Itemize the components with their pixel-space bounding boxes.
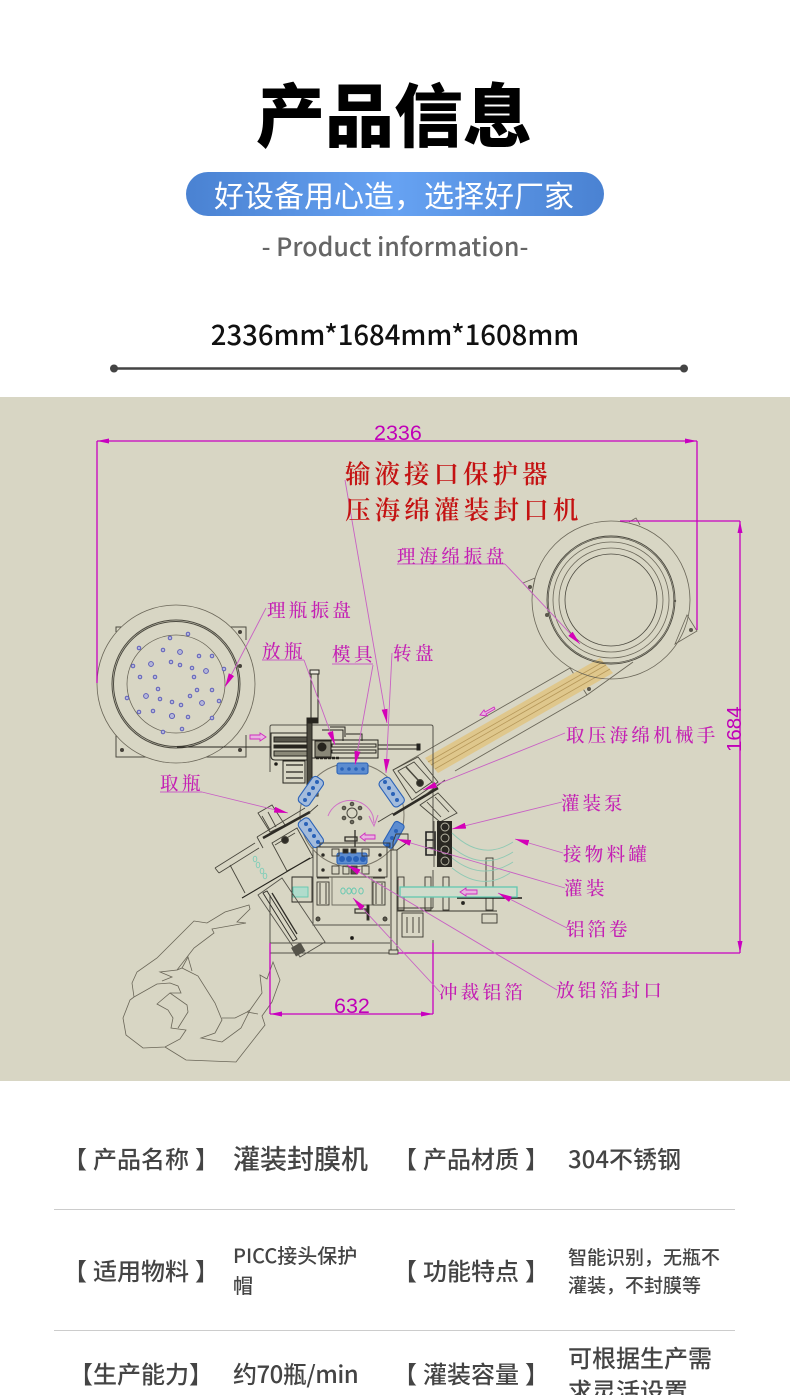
right vibrating bowl: [523, 518, 697, 691]
hollow direction arrows: [250, 707, 495, 896]
left pick arm: [215, 805, 318, 902]
dimension values: [334, 421, 746, 1018]
spec: fill volume label: 【灌装容量】: [393, 1355, 549, 1390]
rotary dial with bottle holders: [297, 763, 406, 864]
part labels: [160, 543, 719, 1005]
drawing title: 输液接口保护器: [345, 455, 552, 491]
part labels: 取瓶: [160, 770, 204, 796]
spec: product name label: 【产品名称】: [63, 1140, 219, 1175]
part labels: 转盘: [393, 640, 437, 666]
dimension values: 1684: [723, 706, 746, 752]
part labels: 接物料罐: [563, 841, 650, 867]
filling pump and tubes: [426, 821, 513, 881]
divider with end dots: [110, 364, 688, 372]
title: 产品信息: [256, 61, 532, 161]
left vibrating bowl: [97, 605, 255, 763]
drawing title: 压海绵灌装封口机: [345, 491, 583, 527]
bottles in bowl: [125, 632, 226, 734]
dimension values: 2336: [374, 421, 422, 445]
part labels: 理瓶振盘: [267, 597, 354, 623]
part labels: 模具: [332, 641, 376, 667]
leader lines: [160, 480, 580, 992]
part labels: 放铝箔封口: [556, 977, 665, 1003]
part labels: 取压海绵机械手: [566, 722, 719, 748]
part labels: 冲裁铝箔: [439, 979, 526, 1005]
spec: applicable material value: 帽: [233, 1270, 253, 1299]
lower-left device: [258, 878, 325, 957]
dimension lines: [97, 441, 740, 1014]
spec: capacity label: 【生产能力】: [69, 1355, 213, 1390]
spec: fill volume value: 可根据生产需: [568, 1339, 712, 1374]
part labels: 理海绵振盘: [397, 543, 508, 569]
tall post and top carriage: [177, 670, 420, 796]
spec: applicable material label: 【适用物料】: [63, 1252, 219, 1287]
machine frame: [270, 725, 433, 953]
punching station: [316, 843, 390, 940]
panel: technical drawing: [0, 397, 790, 1081]
panel: specification table: [54, 1138, 735, 1395]
spec: features label: 【功能特点】: [393, 1252, 549, 1287]
foil roll station: [389, 834, 522, 954]
dimension values: 632: [334, 994, 370, 1018]
drawing title: [345, 455, 583, 527]
subtitle: - Product information-: [262, 228, 528, 264]
spec: material label: 【产品材质】: [393, 1140, 549, 1175]
spec: capacity value: 约70瓶/min: [233, 1355, 358, 1390]
spec: fill volume value: [568, 1339, 712, 1395]
row divider 1: [54, 1209, 735, 1210]
spec: features value: 灌装，不封膜等: [568, 1271, 701, 1298]
part labels: 灌装: [564, 875, 608, 901]
part labels: 灌装泵: [561, 790, 626, 816]
spec: features value: [568, 1243, 720, 1298]
spec: applicable material value: [233, 1240, 357, 1299]
right pick arm: [378, 757, 457, 822]
spec: material value: 304不锈钢: [568, 1140, 681, 1175]
spec: features value: 智能识别，无瓶不: [568, 1243, 720, 1270]
dimensions text: 2336mm*1684mm*1608mm: [211, 313, 579, 353]
spec: product name value: 灌装封膜机: [233, 1138, 368, 1177]
feed track: [393, 658, 633, 773]
row divider 2: [54, 1330, 735, 1331]
spec: applicable material value: PICC接头保护: [233, 1240, 357, 1269]
slogan pill: 好设备用心造，选择好厂家: [214, 172, 574, 216]
part labels: 铝箔卷: [566, 916, 631, 942]
operator hands outline: [123, 905, 280, 1062]
part labels: 放瓶: [262, 638, 306, 664]
